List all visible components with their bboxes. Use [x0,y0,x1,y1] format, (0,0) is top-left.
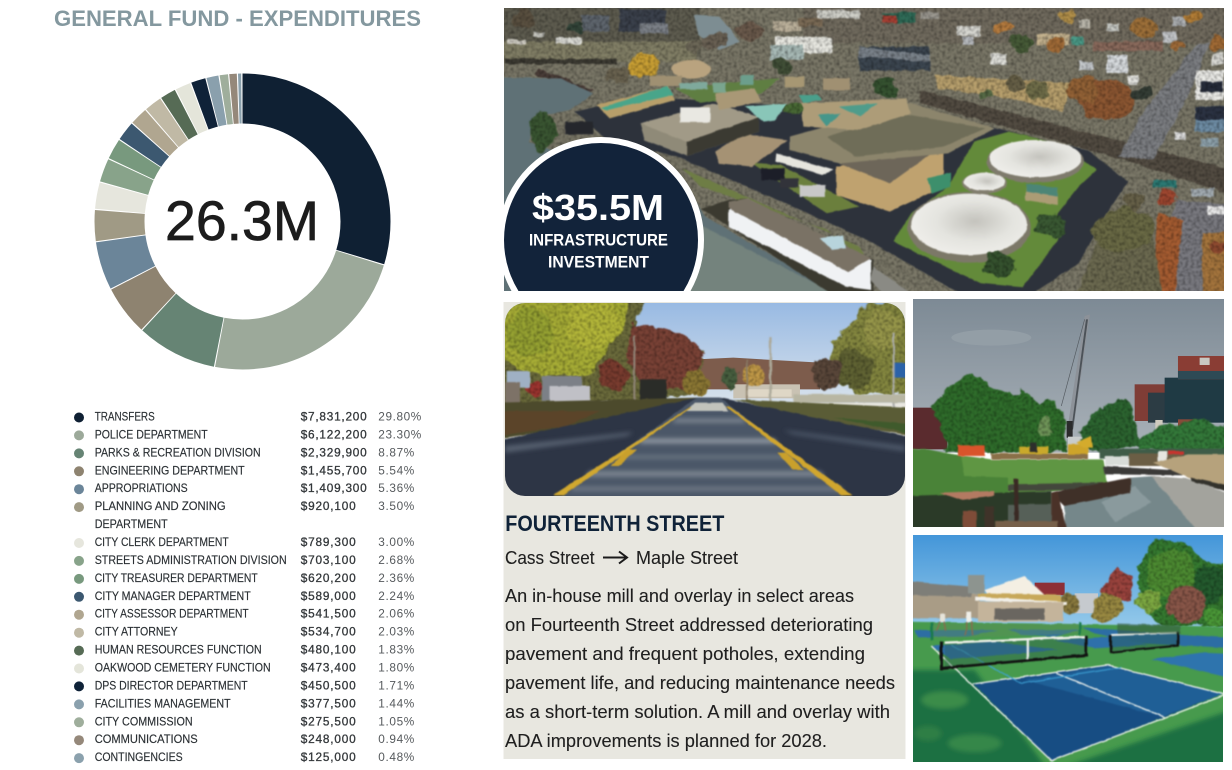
legend row: manager [74,589,415,603]
lawns [893,132,1097,287]
court surface [905,622,1231,770]
legend row: transfers [74,410,422,424]
legend row: attorney: $534,700 [301,625,356,639]
domes [986,149,1084,184]
dam and walkway [1105,456,1129,465]
legend row: contingencies [74,750,415,764]
plant buildings [836,145,943,212]
body text: pavement life, and reducing maintenance needs [505,673,895,693]
legend row: police: POLICE DEPARTMENT [95,427,208,441]
legend row: city commission [74,714,415,728]
legend row: contingencies: $125,000 [301,750,356,764]
sheet pile wall [1051,478,1131,506]
near court [973,665,1223,761]
town buildings [859,47,929,71]
legend row: dps director: DPS DIRECTOR DEPARTMENT [95,678,248,692]
body text: ADA improvements is planned for 2028. [505,731,827,751]
callout label: INFRASTRUCTURE [529,232,668,250]
legend row: planning and zoning [74,499,415,531]
legend row: engineering [74,463,415,477]
donut total: 26.3M [165,189,319,252]
buildings [913,408,948,450]
callout value: $35.5M [532,187,664,228]
legend row: contingencies: CONTINGENCIES [95,750,183,764]
road [505,396,905,496]
legend row: communications: $248,000 [301,732,356,746]
waterfront building [701,198,873,300]
cars [761,168,785,180]
legend row: facilities [74,696,415,710]
shore and water [913,490,1052,527]
legend row: human resources [74,643,415,657]
body text: pavement and frequent potholes, extending [505,644,865,664]
donut chart [120,98,366,344]
legend row: assessor: 2.06% [378,607,415,621]
legend row: attorney: CITY ATTORNEY [95,625,178,639]
photo: aerial view of treatment plant [504,8,1224,291]
heading: FOURTEENTH STREET [505,511,725,536]
legend row: treasurer: 2.36% [378,571,415,585]
legend row: streets: STREETS ADMINISTRATION DIVISION [95,553,287,567]
legend row: planning and zoning: 3.50% [378,499,415,513]
legend row: human resources: $480,100 [301,643,356,657]
legend row: facilities: 1.44% [378,696,415,710]
legend row: parks: 8.87% [378,445,415,459]
legend row: planning and zoning: PLANNING AND ZONING [95,499,226,513]
legend row: human resources: HUMAN RESOURCES FUNCTION [95,643,262,657]
legend row: planning and zoning: $920,100 [301,499,356,513]
legend row: streets [74,553,415,567]
legend row: dps director: 1.71% [378,678,415,692]
body text: on Fourteenth Street addressed deteriorating [505,615,873,635]
legend row: police [74,427,422,441]
legend row: transfers: 29.80% [378,410,422,424]
legend row: city clerk [74,535,415,549]
legend row: dps director [74,678,415,692]
players [966,612,972,622]
far courts [915,630,998,637]
route from: Cass Street [505,548,594,568]
legend row: assessor: $541,500 [301,607,356,621]
bank [1153,453,1224,486]
legend row: transfers: TRANSFERS [95,410,155,424]
callout label line two: INVESTMENT [548,254,649,272]
machinery [958,445,985,456]
legend row: manager: 2.24% [378,589,415,603]
legend row: streets: 2.68% [378,553,415,567]
legend row: manager: CITY MANAGER DEPARTMENT [95,589,251,603]
panel: fourteenth street [497,293,913,759]
legend row: oakwood cemetery [74,660,415,674]
legend row: treasurer [74,571,415,585]
legend row: communications: COMMUNICATIONS [95,732,198,746]
callout: infrastructure investment [504,137,704,291]
legend row: appropriations [74,481,415,495]
body text [505,586,895,751]
legend row: city clerk: $789,300 [301,535,356,549]
legend row: parks: $2,329,900 [301,445,367,459]
nets [945,637,1086,667]
legend row: facilities: $377,500 [301,696,356,710]
body text: An in-house mill and overlay in select areas [505,586,854,606]
legend row: communications: 0.94% [378,732,415,746]
legend row: attorney [74,625,415,639]
legend [74,410,422,764]
legend row: police: 23.30% [378,427,422,441]
legend row: communications [74,732,415,746]
legend row: appropriations: $1,409,300 [301,481,367,495]
legend row: oakwood cemetery: OAKWOOD CEMETERY FUNCTION [95,660,271,674]
photo: street view [505,303,905,496]
legend row: facilities: FACILITIES MANAGEMENT [95,696,231,710]
legend row: parks: PARKS & RECREATION DIVISION [95,445,261,459]
legend row: contingencies: 0.48% [378,750,415,764]
legend row: treasurer: $620,200 [301,571,356,585]
legend row: assessor: CITY ASSESSOR DEPARTMENT [95,607,249,621]
legend row: appropriations: 5.36% [378,481,415,495]
legend row: city commission: 1.05% [378,714,415,728]
legend row: transfers: $7,831,200 [301,410,367,424]
pavilion [905,593,980,618]
legend row: engineering: ENGINEERING DEPARTMENT [95,463,245,477]
legend row: streets: $703,100 [301,553,356,567]
legend row: oakwood cemetery: $473,400 [301,660,356,674]
legend row: parks [74,445,415,459]
legend row: city clerk: CITY CLERK DEPARTMENT [95,535,229,549]
legend row: police: $6,122,200 [301,427,367,441]
legend row: human resources: 1.83% [378,643,415,657]
legend row: city clerk: 3.00% [378,535,415,549]
legend row: appropriations: APPROPRIATIONS [95,481,188,495]
court lines [931,646,1231,761]
title: GENERAL FUND - EXPENDITURES [54,6,421,31]
legend row: manager: $589,000 [301,589,356,603]
legend row: planning and zoning: DEPARTMENT [95,517,168,531]
legend row: assessor [74,607,415,621]
legend row: city commission: $275,500 [301,714,356,728]
legend row: engineering: $1,455,700 [301,463,367,477]
legend row: dps director: $450,500 [301,678,356,692]
icon: arrow [603,552,627,564]
legend row: city commission: CITY COMMISSION [95,714,193,728]
legend row: oakwood cemetery: 1.80% [378,660,415,674]
asphalt [575,97,1128,300]
legend row: attorney: 2.03% [378,625,415,639]
body text: as a short-term solution. A mill and overlay with [505,702,890,722]
route to: Maple Street [636,548,738,568]
photo: pickleball courts [913,535,1223,762]
photo: riverfront construction site [905,296,1231,536]
legend row: treasurer: CITY TREASURER DEPARTMENT [95,571,258,585]
water [694,15,740,50]
trees [530,112,556,152]
legend row: engineering: 5.54% [378,463,415,477]
